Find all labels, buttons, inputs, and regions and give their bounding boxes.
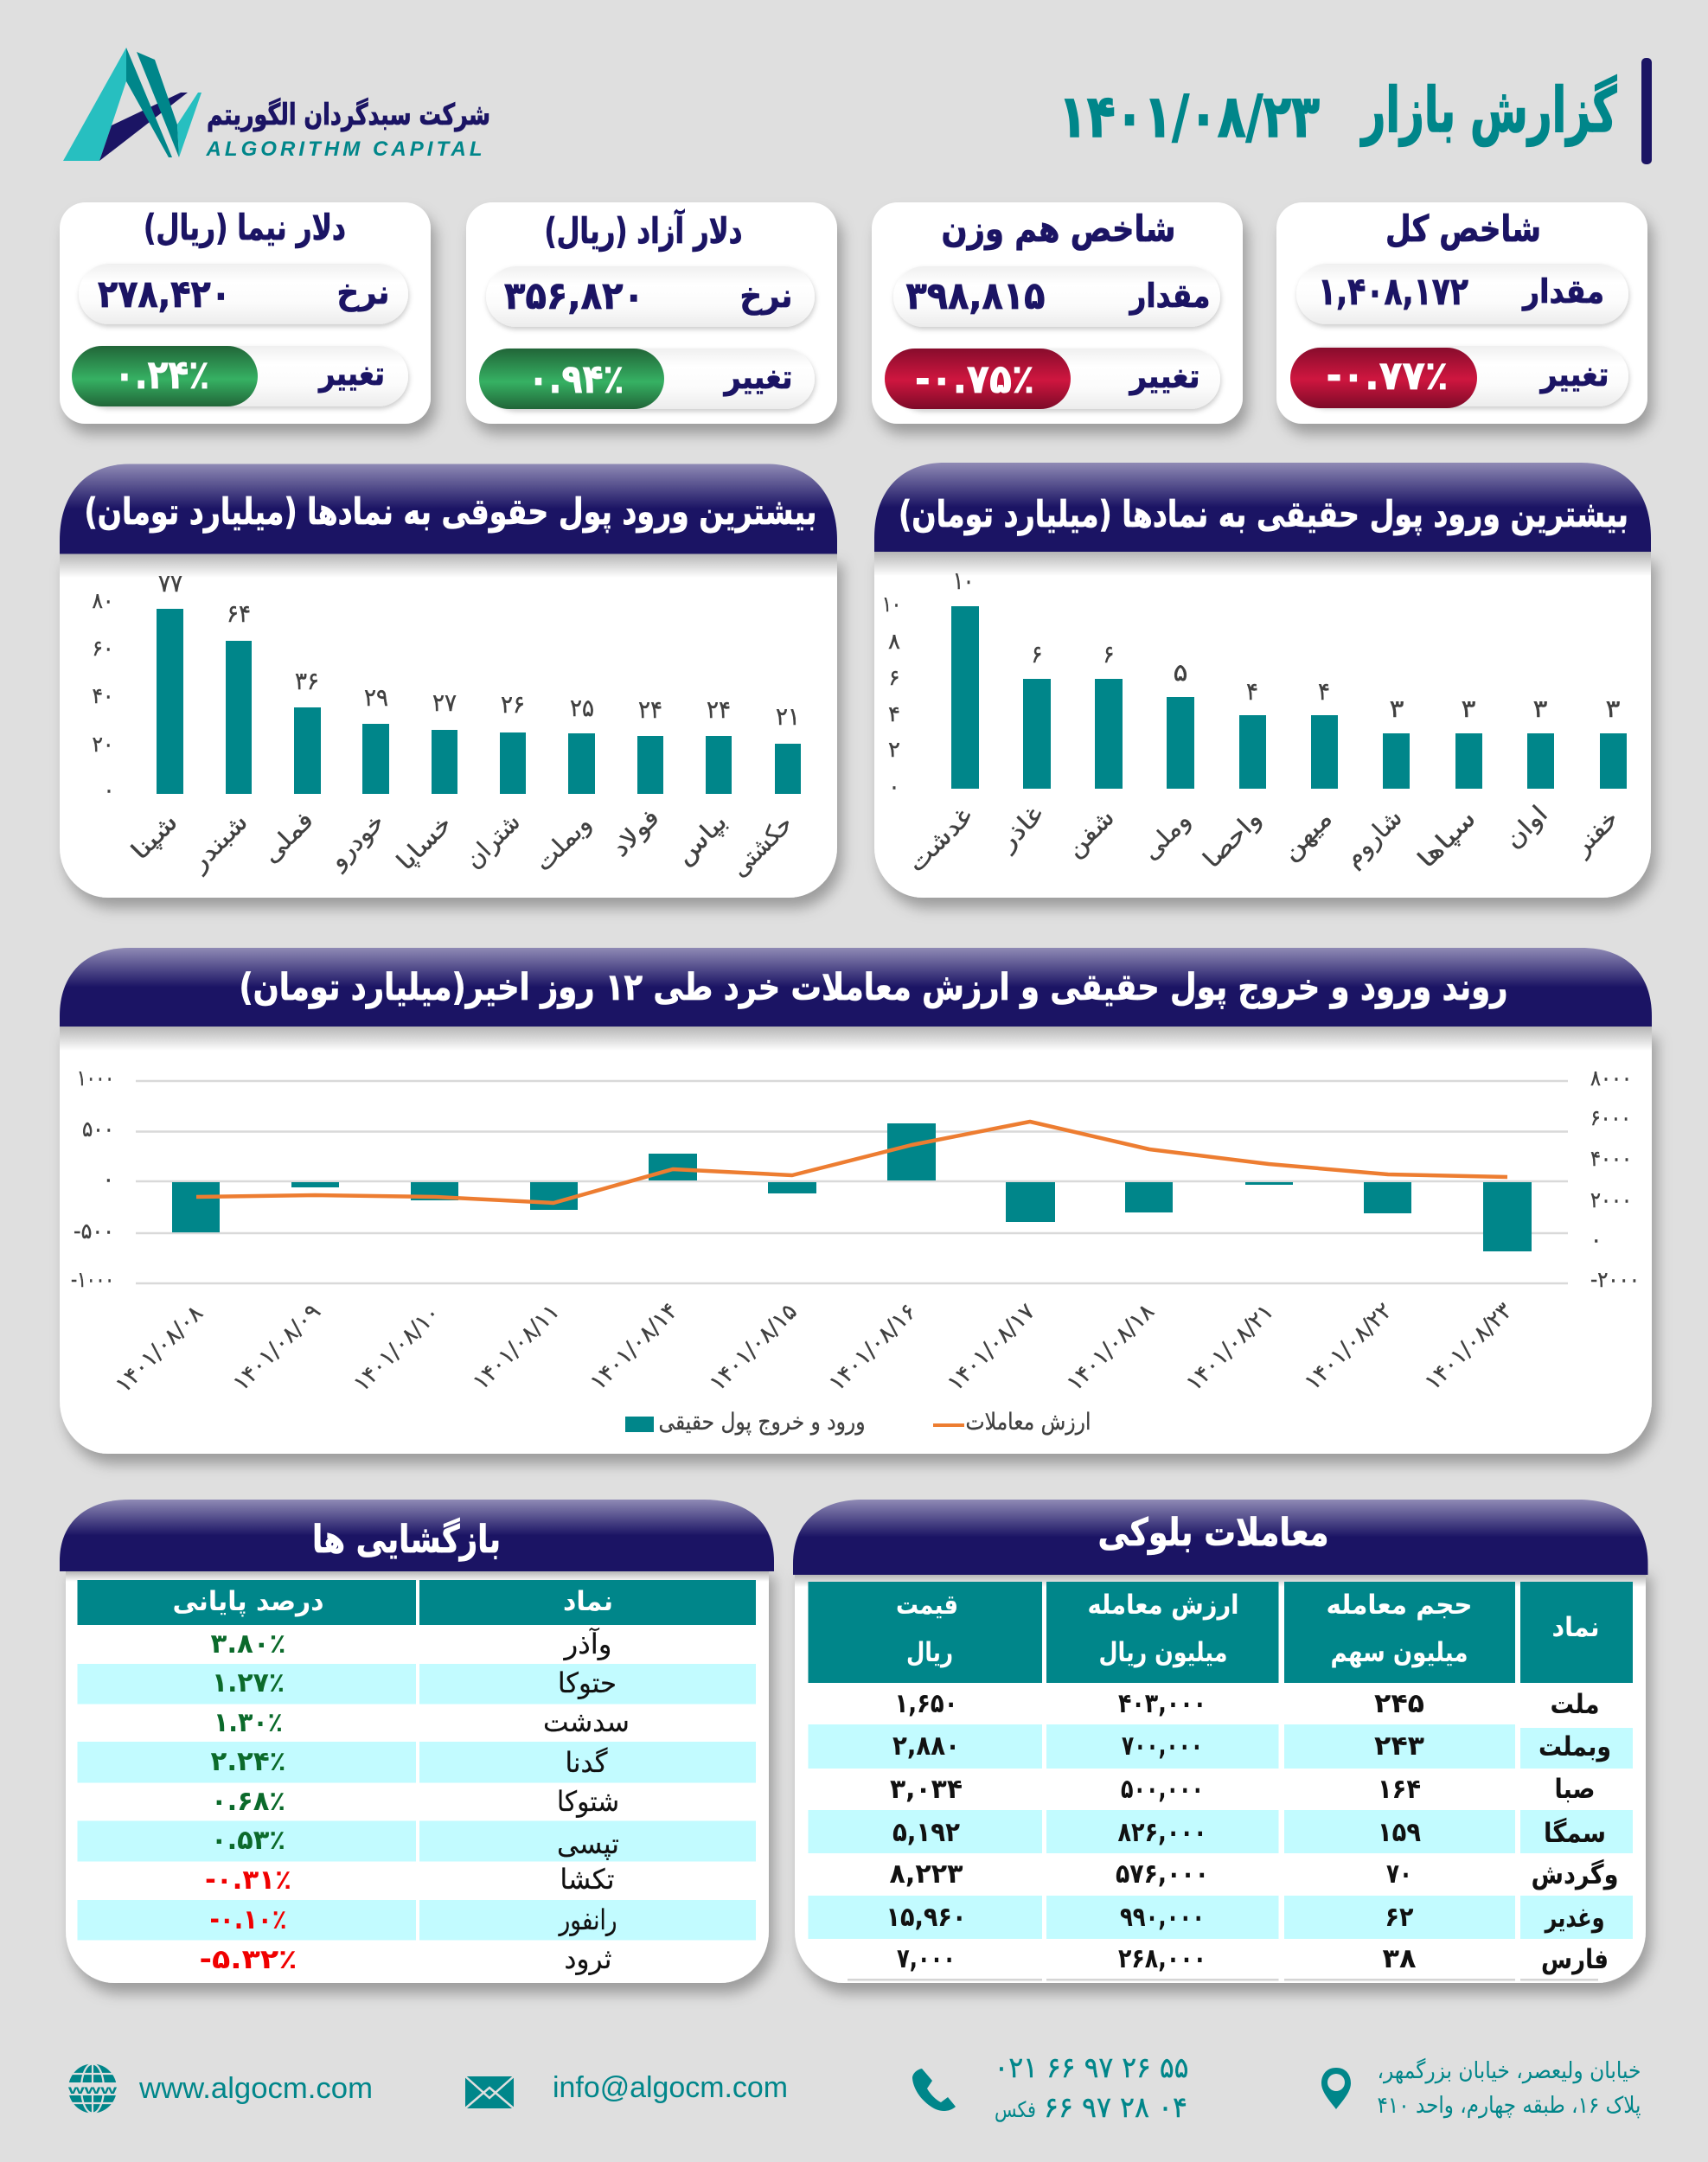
symbol labels: شفن xyxy=(1060,803,1120,863)
fax number: فکس xyxy=(995,2097,1036,2122)
date labels: ۱۴۰۱/۰۸/۱۴ xyxy=(585,1298,683,1396)
header labels: نماد xyxy=(563,1586,613,1617)
card: Nima dollar: نرخ xyxy=(337,273,389,311)
card: equal-weight index: -۰.۷۵٪ xyxy=(915,355,1034,402)
bars xyxy=(157,609,801,794)
value labels: ۲۴ xyxy=(707,695,731,724)
y axis: ۴ xyxy=(888,701,900,726)
symbol labels: شتران xyxy=(459,808,526,874)
card: free dollar: ۰.۹۴٪ xyxy=(528,355,624,402)
symbol labels: وبملت xyxy=(528,809,597,877)
left axis: -۱۰۰۰ xyxy=(71,1267,114,1292)
value labels: ۵ xyxy=(1173,658,1188,687)
panel: block trades table xyxy=(793,1500,1648,1983)
y axis: ۸۰ xyxy=(92,588,114,613)
card: Nima dollar: تغییر xyxy=(317,355,385,393)
panel: reopenings table xyxy=(60,1500,774,1983)
legend xyxy=(625,1409,1091,1436)
date labels xyxy=(111,1298,1518,1398)
value labels xyxy=(953,566,1621,723)
right axis xyxy=(1590,1065,1640,1292)
table header xyxy=(808,1582,1633,1683)
table values: ثرود xyxy=(564,1942,612,1975)
y axis: ۶۰ xyxy=(92,636,114,661)
table values: -۰.۱۰٪ xyxy=(209,1904,287,1935)
y axis: ۰ xyxy=(103,777,115,803)
header labels: نماد xyxy=(1551,1612,1600,1643)
card: total index: تغییر xyxy=(1539,355,1609,393)
symbol labels: غدشت xyxy=(902,802,978,878)
card: free dollar: ۳۵۶,۸۲۰ xyxy=(504,274,644,318)
value labels: ۴ xyxy=(1246,677,1258,706)
card: Nima dollar: ۲۷۸,۴۲۰ xyxy=(98,272,231,317)
table values: ۴۰۳,۰۰۰ xyxy=(1118,1688,1206,1719)
turnover line xyxy=(196,1122,1507,1203)
date labels: ۱۴۰۱/۰۸/۱۸ xyxy=(1062,1299,1160,1397)
table values xyxy=(886,1688,1619,1975)
panel: retail inflow chart xyxy=(874,463,1651,898)
email: info@algocm.com xyxy=(553,2071,788,2104)
table values: ۷۰۰,۰۰۰ xyxy=(1122,1730,1203,1762)
phone number: ۰۲۱ ۶۶ ۹۷ ۲۶ ۵۵ xyxy=(995,2050,1188,2084)
date labels: ۱۴۰۱/۰۸/۲۲ xyxy=(1300,1298,1398,1396)
panel: institutional inflow chart xyxy=(60,464,837,898)
table values: ۱,۶۵۰ xyxy=(894,1688,958,1719)
symbol labels: خودرو xyxy=(322,808,390,875)
table values: ۲۴۵ xyxy=(1374,1688,1424,1719)
right axis: ۸۰۰۰ xyxy=(1590,1065,1632,1091)
right axis: ۲۰۰۰ xyxy=(1590,1187,1632,1212)
table values: ۶۲ xyxy=(1385,1902,1414,1933)
report date: ۱۴۰۱/۰۸/۲۳ xyxy=(1059,83,1320,151)
table values: سدشت xyxy=(543,1705,630,1738)
table values: ۸,۲۲۳ xyxy=(889,1858,963,1890)
value labels: ۶۴ xyxy=(227,599,251,628)
table values: فارس xyxy=(1541,1944,1609,1975)
panel: 12-day retail flow and turnover chart xyxy=(60,948,1652,1454)
symbol labels: وملی xyxy=(1136,806,1196,866)
card: total index xyxy=(1276,202,1647,424)
value labels: ۱۰ xyxy=(953,566,974,595)
value labels: ۳ xyxy=(1605,694,1621,723)
value labels: ۳ xyxy=(1462,694,1475,723)
address: پلاک ۱۶، طبقه چهارم، واحد ۴۱۰ xyxy=(1377,2093,1641,2119)
table values: ۵۷۶,۰۰۰ xyxy=(1116,1858,1209,1890)
table values: ۳,۰۳۴ xyxy=(890,1774,963,1805)
symbol labels xyxy=(125,803,798,882)
card: Nima dollar: ۰.۲۴٪ xyxy=(114,351,209,398)
y axis: ۲۰ xyxy=(92,732,114,757)
icon: globe xyxy=(65,2063,120,2114)
y axis: ۴۰ xyxy=(92,683,114,708)
card: total index: مقدار xyxy=(1521,272,1604,310)
header labels: حجم معامله xyxy=(1327,1590,1472,1621)
card: free dollar: نرخ xyxy=(740,277,792,315)
card: equal-weight index xyxy=(872,202,1243,424)
table bottom rule xyxy=(848,1979,1598,1980)
table values: ۹۹۰,۰۰۰ xyxy=(1120,1902,1205,1933)
date labels: ۱۴۰۱/۰۸/۱۰ xyxy=(349,1301,445,1397)
website: www.algocm.com xyxy=(138,2072,373,2105)
value labels: ۳۶ xyxy=(295,667,319,695)
table values: صبا xyxy=(1555,1774,1595,1805)
bars xyxy=(951,606,1627,789)
value labels: ۲۶ xyxy=(501,690,525,719)
symbol labels: اوان xyxy=(1499,800,1553,854)
table values: تکشا xyxy=(560,1863,614,1896)
value labels: ۶ xyxy=(1031,640,1043,668)
icon: phone xyxy=(912,2069,956,2111)
date labels: ۱۴۰۱/۰۸/۰۹ xyxy=(228,1299,326,1397)
table values: ۱۵۹ xyxy=(1378,1817,1421,1848)
address xyxy=(1377,2057,1641,2119)
right axis: ۰ xyxy=(1590,1227,1602,1252)
right axis: ۴۰۰۰ xyxy=(1590,1146,1632,1171)
value labels: ۲۵ xyxy=(570,694,594,722)
symbol labels: شاروم xyxy=(1338,803,1408,873)
table values: ۷۰ xyxy=(1386,1858,1412,1890)
date labels: ۱۴۰۱/۰۸/۱۱ xyxy=(468,1299,565,1395)
value labels: ۷۷ xyxy=(158,569,182,598)
table header xyxy=(78,1580,756,1625)
y axis: ۸ xyxy=(888,629,900,654)
table values: ۵۰۰,۰۰۰ xyxy=(1121,1774,1204,1805)
panel: 12-day retail flow and turnover chart: روند ورود و خروج پول حقیقی و ارزش معاملات خرد طی ۱۲ روز اخیر(میلیارد تومان) xyxy=(239,966,1507,1009)
table values: ملت xyxy=(1550,1689,1600,1720)
value labels: ۲۷ xyxy=(432,688,457,717)
table values: ۳.۸۰٪ xyxy=(211,1628,285,1660)
table values: -۰.۳۱٪ xyxy=(205,1865,291,1896)
table values: ۳۸ xyxy=(1382,1943,1417,1974)
table values: رانفور xyxy=(558,1903,617,1936)
legend: ورود و خروج پول حقیقی xyxy=(659,1409,865,1436)
header labels: درصد پایانی xyxy=(173,1586,323,1617)
icon: globe: www xyxy=(67,2082,117,2096)
symbol labels: خساپا xyxy=(391,809,457,876)
table values: -۵.۳۲٪ xyxy=(199,1944,297,1975)
card: free dollar: تغییر xyxy=(723,358,792,396)
table values: وغدیر xyxy=(1544,1903,1605,1934)
symbol labels: فولاد xyxy=(605,803,665,862)
value labels: ۳ xyxy=(1389,694,1404,723)
table values: ۱.۳۰٪ xyxy=(214,1707,283,1738)
table values xyxy=(199,1627,630,1975)
card: equal-weight index: تغییر xyxy=(1129,357,1200,395)
card: equal-weight index: ۳۹۸,۸۱۵ xyxy=(906,274,1045,318)
card: total index: شاخص کل xyxy=(1385,208,1541,251)
symbol labels: غاذر xyxy=(991,800,1049,857)
table values: ۲۴۳ xyxy=(1374,1730,1424,1762)
table values: گدنا xyxy=(566,1746,608,1779)
header labels xyxy=(896,1590,1600,1668)
table values: حتوکا xyxy=(558,1666,617,1699)
icon: location pin xyxy=(1321,2068,1351,2109)
table values: ۸۲۶,۰۰۰ xyxy=(1117,1817,1207,1848)
table values: ۲,۸۸۰ xyxy=(892,1730,960,1762)
table values: ۷,۰۰۰ xyxy=(897,1943,956,1974)
y axis: ۶ xyxy=(889,665,899,690)
date labels: ۱۴۰۱/۰۸/۱۵ xyxy=(705,1299,803,1397)
symbol labels: فملی xyxy=(256,806,319,868)
table rows xyxy=(808,1724,1633,1939)
y axis xyxy=(92,588,115,803)
fax number: ۶۶ ۹۷ ۲۸ ۰۴ xyxy=(1044,2090,1187,2124)
symbol labels: میهن xyxy=(1276,804,1338,867)
card: free dollar xyxy=(466,202,837,424)
card: equal-weight index: شاخص هم وزن xyxy=(941,208,1176,251)
value labels: ۶ xyxy=(1103,640,1114,668)
logo: شرکت سبدگردان الگوریتم xyxy=(207,98,490,132)
symbol labels: شبندر xyxy=(182,808,253,878)
card: Nima dollar: دلار نیما (ریال) xyxy=(144,207,346,248)
y axis: ۲ xyxy=(888,737,900,762)
symbol labels: حکشتی xyxy=(725,809,798,882)
value labels xyxy=(158,569,800,731)
right axis: ۶۰۰۰ xyxy=(1590,1105,1631,1130)
table values: ۱.۲۷٪ xyxy=(212,1667,285,1698)
header labels: میلیون سهم xyxy=(1330,1637,1468,1668)
y axis: ۰ xyxy=(888,774,900,799)
card: Nima dollar xyxy=(60,202,431,424)
card: total index: ۱,۴۰۸,۱۷۲ xyxy=(1318,270,1468,314)
left axis: ۱۰۰۰ xyxy=(77,1065,114,1091)
logo: ALGORITHM CAPITAL xyxy=(206,138,483,161)
table values: تپسی xyxy=(557,1827,619,1860)
date labels: ۱۴۰۱/۰۸/۰۸ xyxy=(111,1301,208,1398)
table values: سمگا xyxy=(1544,1817,1606,1849)
table values: ۵,۱۹۲ xyxy=(892,1817,960,1848)
panel: block trades table: معاملات بلوکی xyxy=(1098,1511,1328,1555)
value labels: ۳ xyxy=(1532,694,1548,723)
table values: ۰.۵۳٪ xyxy=(211,1825,285,1856)
date labels: ۱۴۰۱/۰۸/۲۳ xyxy=(1420,1298,1518,1396)
table values: ۱۵,۹۶۰ xyxy=(886,1902,967,1933)
panel: reopenings table: بازگشایی ها xyxy=(312,1517,501,1562)
logo xyxy=(63,48,490,161)
card: equal-weight index: مقدار xyxy=(1129,277,1211,315)
table values: وبملت xyxy=(1538,1731,1611,1762)
flow bars xyxy=(172,1123,1532,1251)
symbol labels: واحصا xyxy=(1197,804,1267,873)
header labels: قیمت xyxy=(896,1590,958,1621)
value labels: ۲۴ xyxy=(638,695,662,724)
symbol labels: سپاها xyxy=(1411,804,1481,873)
card: free dollar: دلار آزاد (ریال) xyxy=(545,209,742,252)
card: total index: -۰.۷۷٪ xyxy=(1327,352,1448,399)
y axis: ۱۰ xyxy=(882,592,901,617)
icon: envelope xyxy=(465,2076,514,2108)
title bar accent xyxy=(1641,58,1652,164)
table values: ۰.۶۸٪ xyxy=(211,1786,285,1817)
table values: وگردش xyxy=(1531,1858,1619,1890)
table values: ۲۶۸,۰۰۰ xyxy=(1118,1943,1206,1974)
date labels: ۱۴۰۱/۰۸/۱۶ xyxy=(824,1299,922,1397)
table rows xyxy=(78,1664,756,1941)
symbol labels: خفنر xyxy=(1566,804,1624,862)
header labels: ارزش معامله xyxy=(1088,1590,1238,1621)
left axis xyxy=(71,1065,114,1292)
header labels: میلیون ریال xyxy=(1098,1637,1228,1668)
header labels xyxy=(173,1586,613,1617)
panel: institutional inflow chart: بیشترین ورود پول حقوقی به نمادها (میلیارد تومان) xyxy=(85,490,816,534)
date labels: ۱۴۰۱/۰۸/۲۱ xyxy=(1181,1299,1279,1397)
symbol labels xyxy=(902,800,1624,878)
header labels: ریال xyxy=(906,1637,953,1668)
value labels: ۴ xyxy=(1318,677,1330,706)
y axis xyxy=(882,592,901,799)
left axis: ۰ xyxy=(103,1167,114,1192)
value labels: ۲۱ xyxy=(776,702,800,731)
address: خیابان ولیعصر، خیابان بزرگمهر، xyxy=(1377,2057,1641,2084)
value labels: ۲۹ xyxy=(364,683,388,712)
symbol labels: شپنا xyxy=(125,808,183,866)
table values: ۲.۲۴٪ xyxy=(211,1746,285,1777)
left axis: -۵۰۰ xyxy=(74,1219,114,1244)
table values: وآذر xyxy=(562,1627,612,1660)
right axis: -۲۰۰۰ xyxy=(1590,1267,1640,1292)
table values: شتوکا xyxy=(557,1785,619,1818)
table values: ۱۶۴ xyxy=(1378,1774,1421,1805)
left axis: ۵۰۰ xyxy=(82,1116,114,1142)
symbol labels: بپاس xyxy=(669,808,732,870)
date labels: ۱۴۰۱/۰۸/۱۷ xyxy=(943,1299,1040,1397)
legend: ارزش معاملات xyxy=(965,1409,1091,1436)
